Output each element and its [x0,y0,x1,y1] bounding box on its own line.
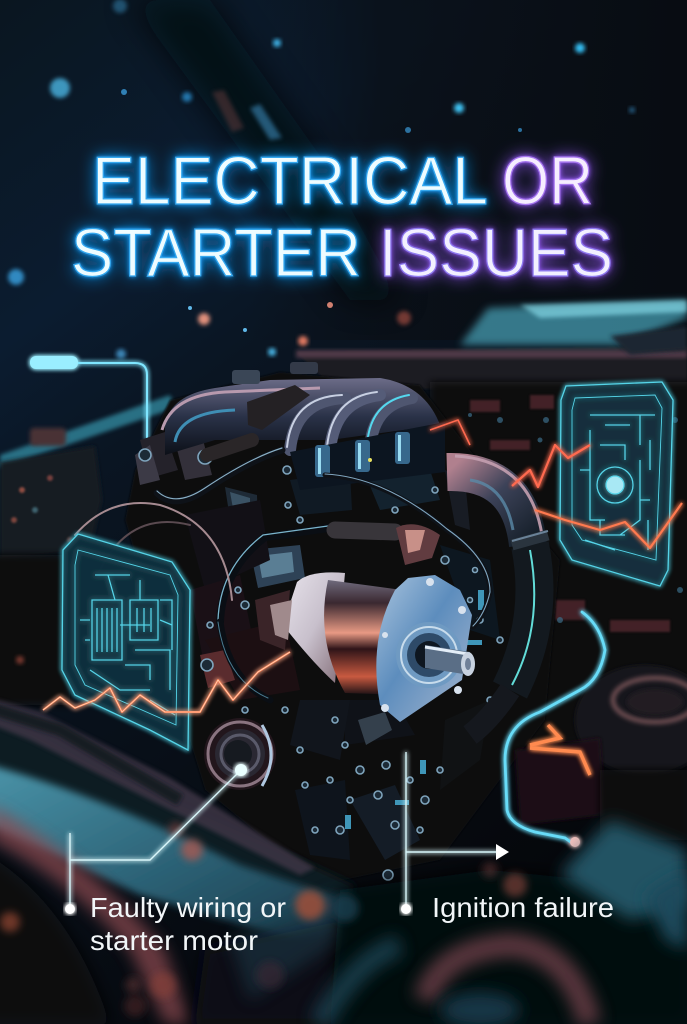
orange electric arcs [43,420,682,712]
callout: ignition failure [401,752,614,923]
title: ISSUES [379,215,613,291]
blurred orange and teal bokeh [0,822,527,1017]
left side engine bay [0,395,175,705]
wiring [75,440,490,700]
callout: ignition failure: Ignition failure [432,892,614,923]
foreground blurred left hood [0,695,355,1024]
title: ELECTRICAL [92,143,488,219]
right foreground component [515,665,687,840]
foreground blurred right [320,820,687,1024]
braided pipe [447,456,548,735]
engine block [75,362,560,885]
lower pulley [204,718,276,790]
floating bokeh particles [8,0,635,359]
title: OR [502,143,593,219]
connector [396,524,440,565]
callout: faulty wiring or starter motor: Faulty wiring or [90,892,286,923]
starter motor [255,572,475,722]
mid engine texture [135,428,503,880]
title [71,143,613,291]
circuit hologram right [560,382,673,586]
neon cable upper left [30,356,147,440]
neon cable lower right [505,612,605,847]
callout: faulty wiring or starter motor [65,764,286,956]
intake manifold [162,362,445,490]
bolts [139,440,503,880]
upper right hood panels [296,300,687,742]
shaft [425,645,470,675]
title: STARTER [71,215,361,291]
callout: faulty wiring or starter motor: starter motor [90,925,258,956]
circuit hologram left [62,534,190,750]
